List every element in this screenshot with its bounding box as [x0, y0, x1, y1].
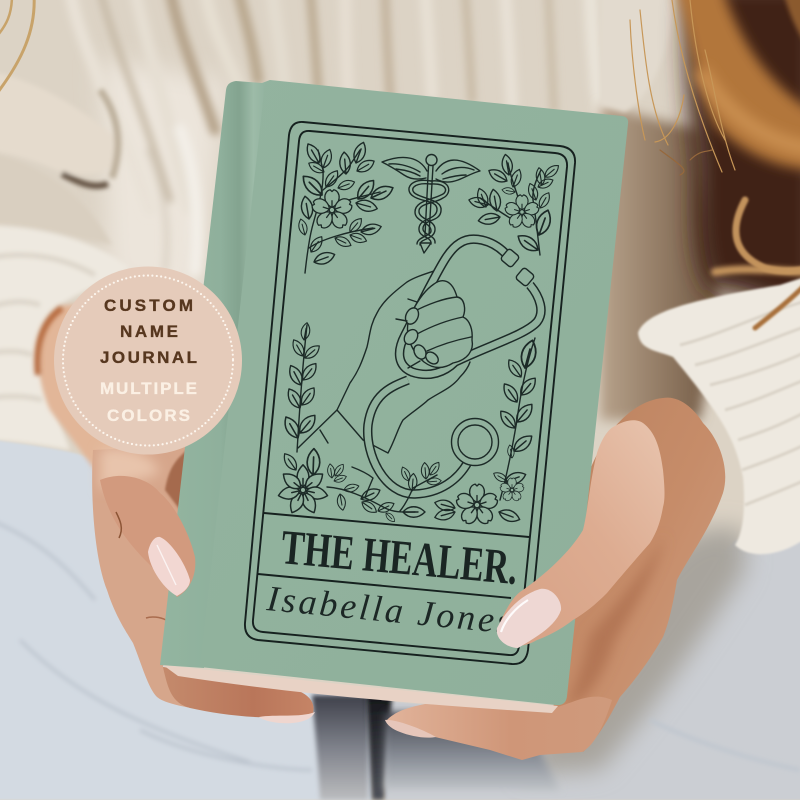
- top-left flower spray: [297, 141, 395, 273]
- badge text: custom name journal: NAME: [120, 322, 178, 341]
- left hand bottom nail: [259, 712, 315, 723]
- badge text: custom name journal: JOURNAL: [100, 348, 197, 367]
- left sleeve: [0, 70, 130, 450]
- sweater shoulder upper right: [600, 0, 680, 112]
- brown shadow behind book on right: [600, 105, 720, 420]
- hair strands: [630, 0, 800, 328]
- badge: [54, 266, 242, 454]
- book title: THE HEALER.: [279, 519, 520, 595]
- shadow under left leg edge: [312, 695, 368, 800]
- badge text: multiple colors: MULTIPLE: [100, 379, 197, 398]
- badge circle: [54, 266, 242, 454]
- jeans: [0, 438, 800, 800]
- bottom-right botanical wreath: [434, 338, 539, 526]
- hair right: [672, 0, 800, 345]
- right hand: [553, 398, 725, 752]
- shadow under right hand: [384, 712, 560, 790]
- top-right flower spray: [468, 154, 561, 255]
- right hand bottom nail: [385, 720, 436, 738]
- personalised name: Isabella Jones: [264, 578, 513, 641]
- stethoscope and hand: [298, 239, 541, 497]
- left thumb nail: [148, 537, 190, 596]
- badge text: custom name journal: [100, 296, 197, 367]
- badge text: multiple colors: [100, 379, 197, 425]
- right sleeve: [638, 272, 800, 554]
- right thumb: [497, 420, 664, 648]
- fist: [408, 281, 472, 367]
- left hand: [92, 445, 313, 717]
- book spine: [160, 80, 270, 668]
- journal pages: [163, 665, 558, 713]
- arm and palm outline: [337, 270, 470, 453]
- cover frame: [245, 122, 575, 664]
- right hand fingers: [387, 697, 612, 760]
- left thumb: [100, 476, 195, 597]
- journal: [160, 80, 628, 705]
- hair left: [0, 0, 34, 92]
- right thumb nail: [497, 589, 561, 648]
- left wrist: [37, 300, 190, 470]
- dotted ring: [63, 276, 233, 446]
- caduceus: [382, 154, 480, 253]
- book front cover: [200, 80, 628, 705]
- bottom-left botanical wreath: [277, 322, 442, 524]
- badge text: custom name journal: CUSTOM: [104, 296, 193, 315]
- ear tubes and lower tube: [368, 239, 541, 494]
- badge text: multiple colors: COLORS: [107, 406, 190, 425]
- gap between legs: [366, 695, 392, 800]
